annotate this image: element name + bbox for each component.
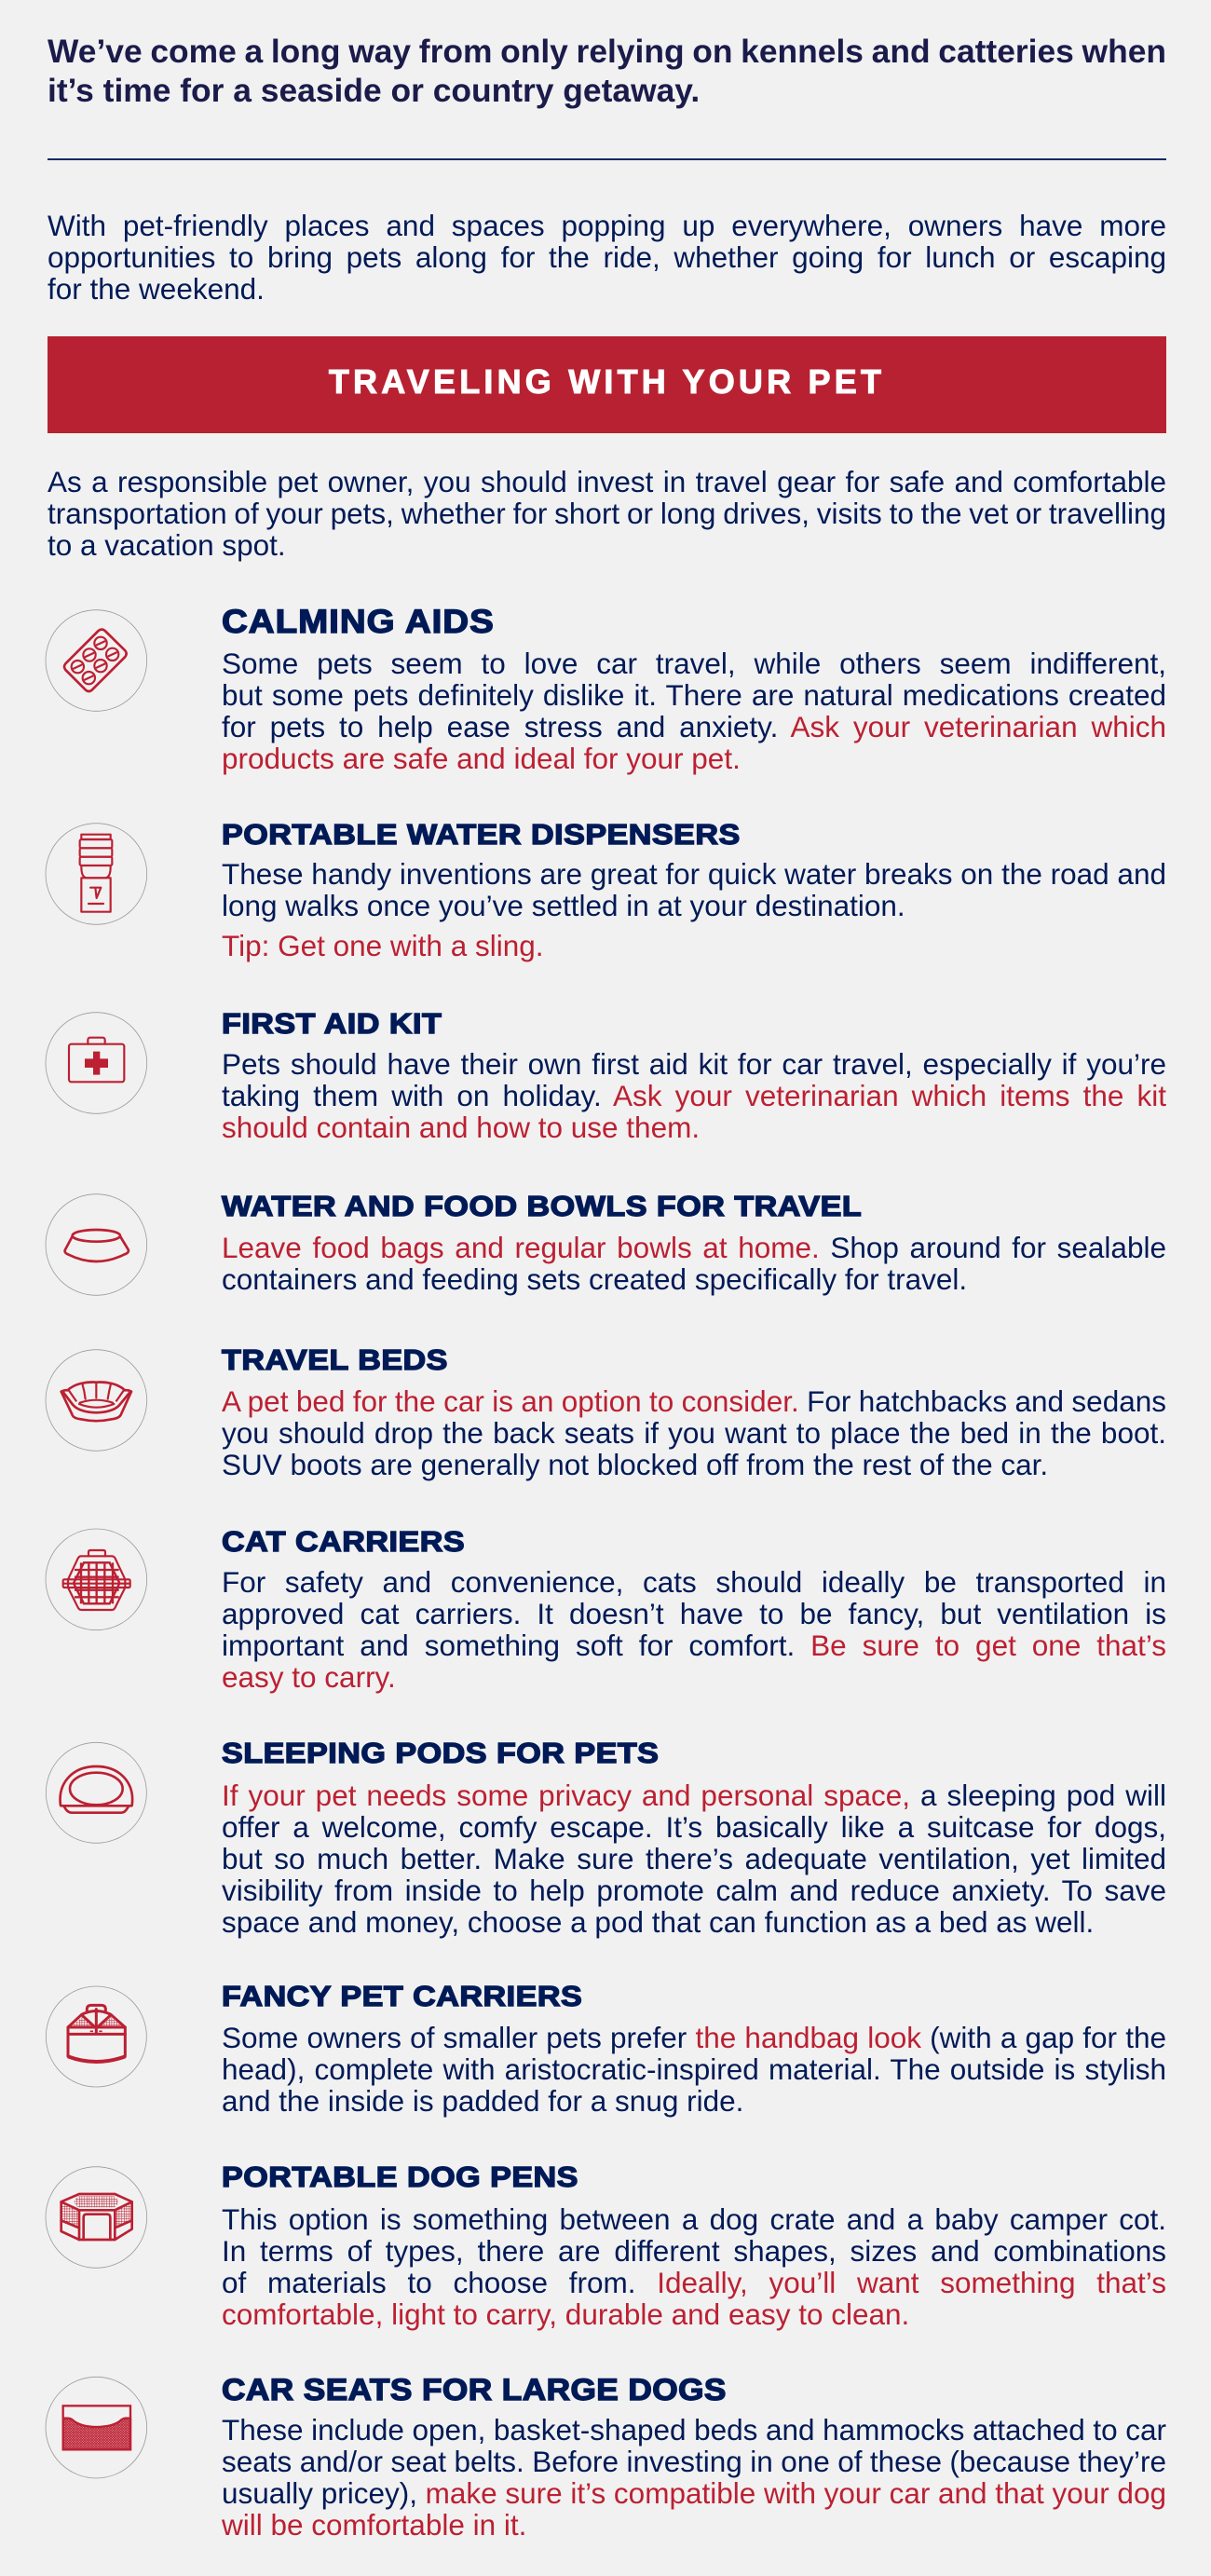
text: approved cat carriers. It doesn’t have to be fancy, but ventilation is xyxy=(222,1597,1166,1630)
text xyxy=(222,1384,1166,1481)
icon: first aid case xyxy=(45,1012,147,1114)
text: of materials to choose from. Ideally, you’ll want something that’s xyxy=(222,2266,1166,2299)
heading: WATER AND FOOD BOWLS FOR TRAVEL xyxy=(222,1190,862,1222)
text: In terms of types, there are different shapes, sizes and combinations xyxy=(222,2234,1166,2268)
title: it’s time for a seaside or country getaway. xyxy=(48,72,700,109)
text: Tip: Get one with a sling. xyxy=(222,929,544,962)
intro text block: opportunities to bring pets along for the ride, whether going for lunch or escaping xyxy=(48,240,1166,274)
icon: car seat hammock xyxy=(45,2376,147,2478)
text xyxy=(222,1230,1166,1295)
text xyxy=(222,1565,1166,1694)
icon: sleeping pod xyxy=(45,1742,147,1844)
text xyxy=(222,2413,1166,2542)
heading: FANCY PET CARRIERS xyxy=(222,1980,582,2012)
panel: car seats for large dogs xyxy=(45,2373,1166,2542)
heading: FIRST AID KIT xyxy=(222,1007,442,1040)
heading: PORTABLE DOG PENS xyxy=(222,2160,578,2193)
text: Some pets seem to love car travel, while others seem indifferent, xyxy=(222,647,1166,680)
text: A pet bed for the car is an option to consider. For hatchbacks and sedans xyxy=(222,1384,1166,1418)
second intro text block: to a vacation spot. xyxy=(48,528,286,562)
icon: fancy carrier xyxy=(45,1986,147,2087)
text: These include open, basket-shaped beds and hammocks attached to car xyxy=(222,2413,1166,2447)
heading: CAR SEATS FOR LARGE DOGS xyxy=(222,2373,727,2406)
text: but some pets definitely dislike it. There are natural medications created xyxy=(222,678,1166,712)
icon: bowl xyxy=(45,1193,147,1296)
text: seats and/or seat belts. Before investing in one of these (because they’re xyxy=(222,2445,1166,2478)
panel: portable dog pens xyxy=(45,2160,1166,2331)
text: easy to carry. xyxy=(222,1660,396,1694)
second intro text block xyxy=(48,465,1166,562)
icon: cat carrier xyxy=(45,1528,147,1630)
text: Pets should have their own first aid kit for car travel, especially if you’re xyxy=(222,1047,1166,1081)
text xyxy=(222,2021,1166,2118)
text: SUV boots are generally not blocked off from the rest of the car. xyxy=(222,1448,1048,1481)
text: important and something soft for comfort. Be sure to get one that’s xyxy=(222,1629,1166,1662)
text: If your pet needs some privacy and personal space, a sleeping pod will xyxy=(222,1778,1166,1811)
text: offer a welcome, comfy escape. It’s basically like a suitcase for dogs, xyxy=(222,1809,1166,1843)
text xyxy=(222,647,1166,775)
panel: travel beds xyxy=(45,1343,1166,1481)
text xyxy=(222,1778,1166,1938)
text: space and money, choose a pod that can function as a bed as well. xyxy=(222,1904,1094,1938)
text: usually pricey), make sure it’s compatible with your car and that your dog xyxy=(222,2476,1166,2510)
heading: CALMING AIDS xyxy=(222,604,495,640)
heading: PORTABLE WATER DISPENSERS xyxy=(222,818,741,851)
panel: calming aids xyxy=(45,604,1166,775)
text: containers and feeding sets created specifically for travel. xyxy=(222,1261,967,1295)
text: comfortable, light to carry, durable and easy to clean. xyxy=(222,2297,909,2331)
icon: dog pen xyxy=(45,2166,147,2269)
panel: first aid kit xyxy=(45,1007,1166,1144)
icon: pet bed xyxy=(45,1349,147,1452)
text: should contain and how to use them. xyxy=(222,1111,700,1144)
text xyxy=(222,857,1166,962)
panel: cat carriers xyxy=(45,1525,1166,1694)
text: Leave food bags and regular bowls at home. Shop around for sealable xyxy=(222,1230,1166,1263)
second intro text block: transportation of your pets, whether for short or long drives, visits to the vet or travelling xyxy=(48,497,1166,530)
banner: traveling with your pet: TRAVELING WITH YOUR PET xyxy=(329,362,885,401)
heading: CAT CARRIERS xyxy=(222,1525,465,1558)
text: This option is something between a dog crate and a baby camper cot. xyxy=(222,2202,1166,2236)
text: but so much better. Make sure there’s adequate ventilation, yet limited xyxy=(222,1841,1166,1874)
text: long walks once you’ve settled in at your destination. xyxy=(222,889,905,922)
intro text block xyxy=(48,209,1166,306)
title: We’ve come a long way from only relying on kennels and catteries when xyxy=(48,33,1166,70)
intro text block: With pet-friendly places and spaces popping up everywhere, owners have more xyxy=(48,209,1166,242)
text: you should drop the back seats if you want to place the bed in the boot. xyxy=(222,1416,1166,1450)
text: for pets to help ease stress and anxiety. Ask your veterinarian which xyxy=(222,710,1166,743)
text: Some owners of smaller pets prefer the handbag look (with a gap for the xyxy=(222,2021,1166,2054)
intro text block: for the weekend. xyxy=(48,272,265,306)
text: will be comfortable in it. xyxy=(222,2508,526,2542)
banner: traveling with your pet xyxy=(48,336,1166,433)
text: visibility from inside to help promote calm and reduce anxiety. To save xyxy=(222,1873,1166,1906)
second intro text block: As a responsible pet owner, you should invest in travel gear for safe and comfortable xyxy=(48,465,1166,498)
text: For safety and convenience, cats should ideally be transported in xyxy=(222,1565,1166,1599)
panel: portable water dispensers xyxy=(45,818,1166,962)
text: and the inside is padded for a snug ride. xyxy=(222,2084,743,2118)
text: taking them with on holiday. Ask your veterinarian which items the kit xyxy=(222,1079,1166,1112)
text: These handy inventions are great for quick water breaks on the road and xyxy=(222,857,1166,891)
icon: pill blister pack xyxy=(45,609,147,712)
panel: sleeping pods xyxy=(45,1737,1166,1938)
icon: water dispenser xyxy=(45,823,147,925)
title xyxy=(48,33,1166,109)
heading: SLEEPING PODS FOR PETS xyxy=(222,1737,659,1769)
panel: fancy pet carriers xyxy=(45,1980,1166,2118)
panel: water and food bowls xyxy=(45,1190,1166,1296)
text: products are safe and ideal for your pet. xyxy=(222,742,741,775)
text xyxy=(222,1047,1166,1144)
text: head), complete with aristocratic-inspired material. The outside is stylish xyxy=(222,2052,1166,2086)
text xyxy=(222,2202,1166,2331)
heading: TRAVEL BEDS xyxy=(222,1343,448,1376)
